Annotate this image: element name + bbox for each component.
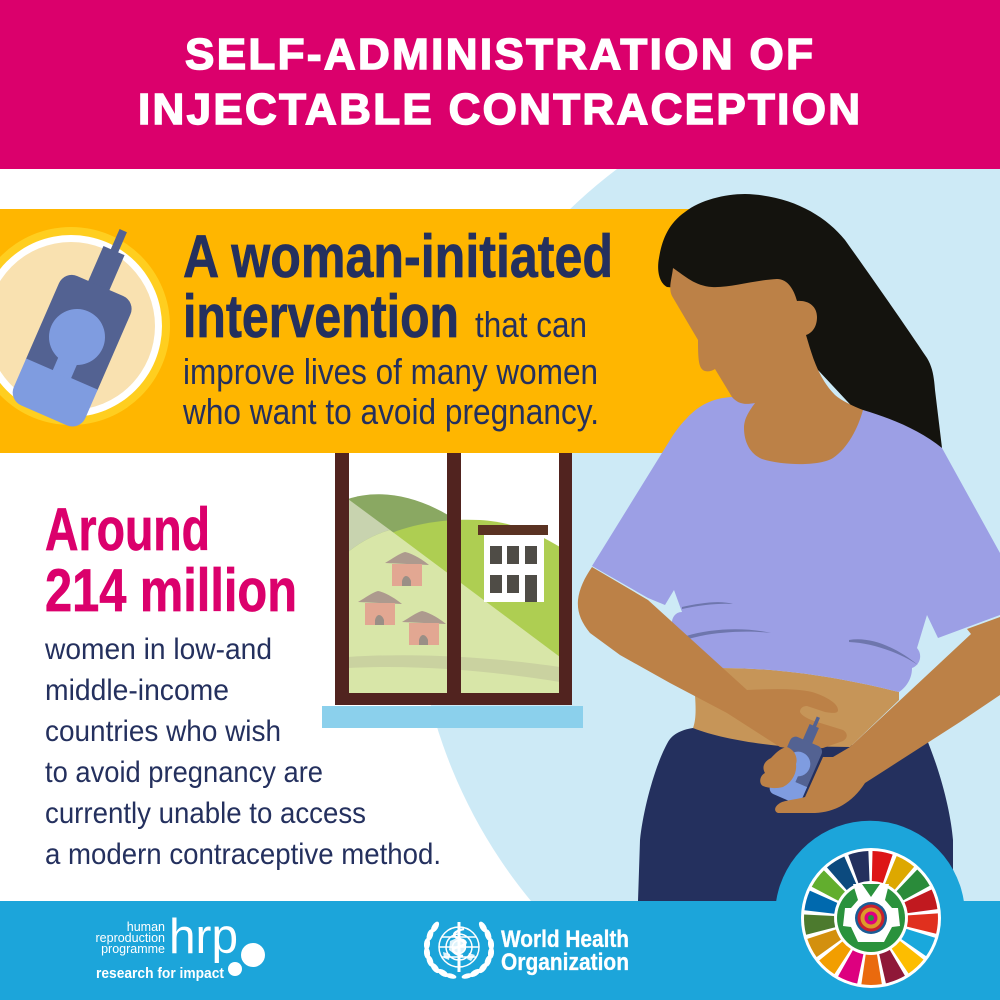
small injector [768, 711, 834, 805]
statistic text: to avoid pregnancy are [45, 756, 323, 789]
trousers [638, 728, 953, 901]
building [478, 525, 548, 602]
banner text: improve lives of many women [183, 351, 598, 392]
header banner [0, 0, 1000, 169]
fist [760, 747, 797, 788]
houses [358, 552, 446, 645]
banner text: A woman-initiated [183, 223, 613, 290]
logo: WHO emblem [423, 920, 495, 980]
logo: HRP: reproduction [96, 931, 165, 945]
statistic heading: Around [45, 496, 210, 563]
yellow banner [0, 209, 745, 453]
title: INJECTABLE CONTRACEPTION [138, 85, 860, 134]
statistic heading: 214 million [45, 557, 297, 624]
logo: WHO wordmark: Organization [501, 949, 629, 976]
title: SELF-ADMINISTRATION OF [185, 30, 813, 79]
title [138, 30, 860, 134]
right arm and hand [775, 617, 1000, 813]
statistic text: currently unable to access [45, 797, 366, 830]
logo: HRP: research for impact [96, 966, 224, 982]
banner text [182, 223, 613, 432]
banner text: intervention [183, 283, 459, 350]
statistic text [44, 633, 441, 871]
woman illustration [578, 194, 1000, 901]
belly [693, 668, 899, 747]
left arm and hand [578, 567, 847, 750]
statistic text: middle-income [45, 674, 229, 707]
footer band [0, 901, 1000, 1000]
statistic heading [45, 496, 297, 624]
shirt [592, 397, 1000, 692]
SDG badge background [776, 821, 964, 902]
logo: WHO wordmark: World Health [501, 926, 629, 953]
shirt folds [682, 602, 918, 665]
icon: injector in circle [0, 215, 170, 431]
head and neck [670, 268, 863, 464]
logo: HRP: programme [101, 942, 165, 956]
statistic text: countries who wish [45, 715, 281, 748]
icon: SDG wheel [797, 844, 945, 992]
banner text: who want to avoid pregnancy. [182, 391, 599, 432]
hair [658, 194, 942, 448]
background circle [414, 169, 1000, 901]
statistic text: a modern contraceptive method. [45, 838, 441, 871]
logo: HRP: hrp [169, 910, 238, 964]
logo: HRP [96, 910, 265, 982]
window with landscape [322, 453, 583, 728]
logo: WHO wordmark [501, 926, 629, 976]
logo: HRP: human [127, 920, 165, 934]
banner text: that can [475, 304, 587, 345]
statistic text: women in low-and [44, 633, 272, 666]
